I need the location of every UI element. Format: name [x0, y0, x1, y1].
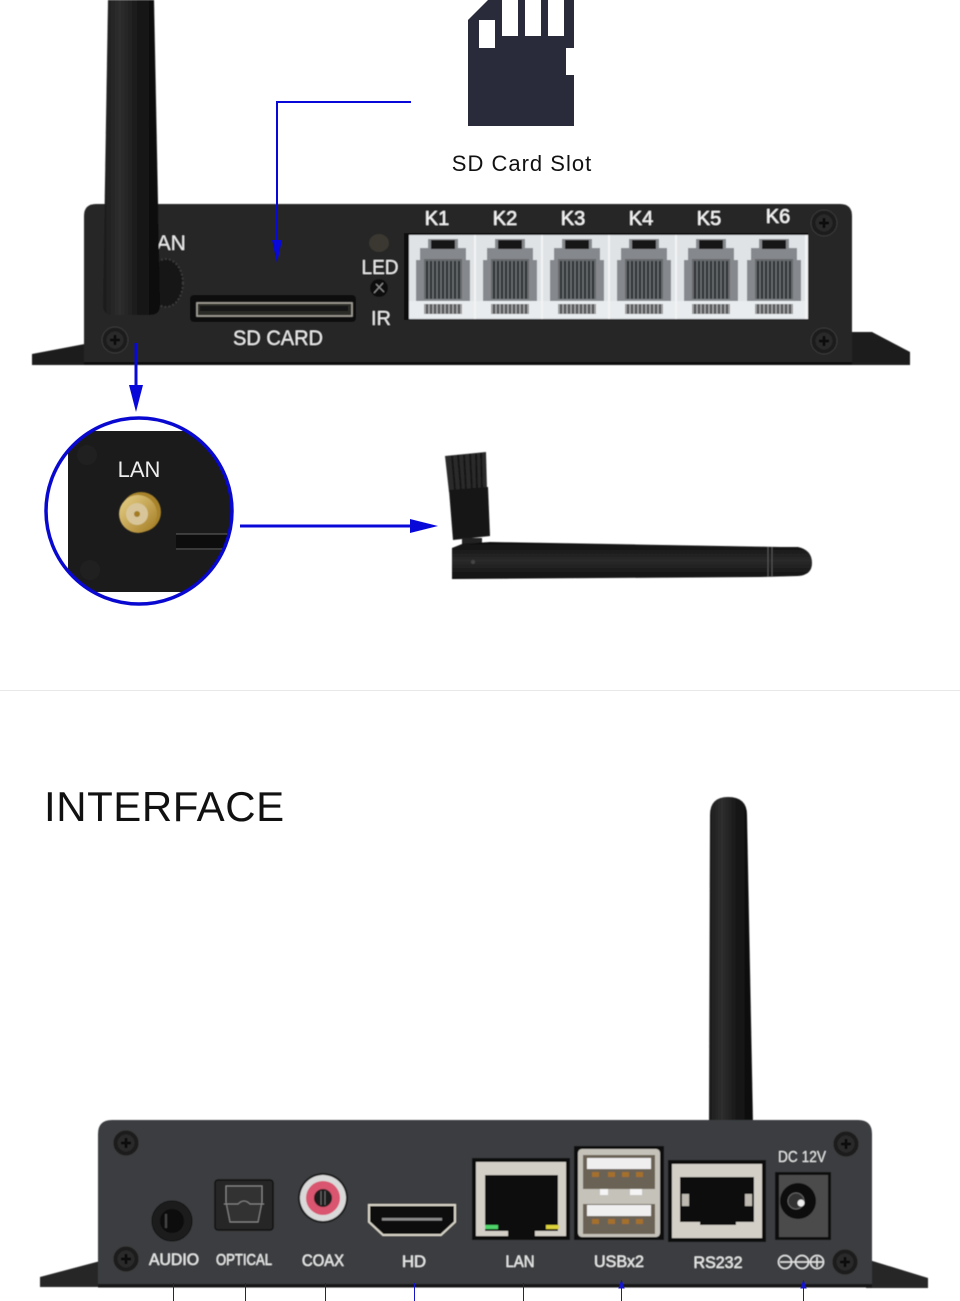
- arrow: to SD slot: [272, 102, 411, 263]
- device body: [84, 204, 852, 365]
- port labels: RS232: [694, 1254, 742, 1272]
- port labels: [149, 1251, 742, 1272]
- device: front panel: [32, 0, 910, 365]
- icon: SD card: [468, 0, 574, 126]
- port labels K1 to K6: K5: [697, 208, 721, 230]
- coax port: [298, 1173, 348, 1223]
- gold connector: [119, 492, 161, 533]
- arm: [452, 542, 812, 579]
- heading: INTERFACE: INTERFACE: [44, 783, 285, 830]
- divider: [0, 690, 960, 691]
- LAN port: [472, 1158, 570, 1240]
- audio jack: [152, 1201, 192, 1241]
- arrow: to antenna: [240, 519, 438, 533]
- port labels K1 to K6: K2: [493, 208, 517, 230]
- antenna nut: [149, 259, 183, 307]
- device: rear panel: [40, 797, 928, 1288]
- label: SD CARD: SD CARD: [233, 327, 323, 350]
- port labels K1 to K6: K3: [561, 208, 585, 230]
- polarity symbol: [778, 1256, 824, 1268]
- black panel: [68, 431, 243, 592]
- label: SD Card Slot: SD Card Slot: [452, 151, 592, 176]
- blue ring: [46, 418, 232, 604]
- knurled cap: [445, 452, 487, 492]
- optical port: [215, 1180, 273, 1230]
- SD card slot: [190, 295, 356, 322]
- barrel: [449, 487, 490, 540]
- antenna: [103, 0, 160, 315]
- mounting flanges: [40, 1259, 928, 1288]
- device body: [98, 1120, 872, 1287]
- port labels K1 to K6: K1: [425, 208, 449, 230]
- port labels: AUDIO: [149, 1251, 199, 1269]
- antenna: folded: [445, 452, 812, 579]
- port labels: HD: [402, 1253, 426, 1271]
- port labels K1 to K6: K4: [629, 208, 653, 230]
- detail circle: LAN connector: [46, 418, 243, 604]
- label: LAN: LAN: [118, 457, 160, 482]
- HD port: [369, 1205, 455, 1235]
- port labels: OPTICAL: [216, 1252, 272, 1269]
- label: DC 12V: DC 12V: [778, 1149, 827, 1166]
- neck: [462, 538, 482, 546]
- callout tick lines: [174, 1281, 806, 1301]
- LED and IR indicators: LED: [362, 257, 398, 279]
- label: LAN partly hidden: LAN: [145, 232, 186, 255]
- LED and IR indicators: IR: [371, 308, 391, 330]
- port labels: USBx2: [594, 1253, 644, 1271]
- LED and IR indicators: [362, 234, 398, 330]
- screws: [113, 1130, 859, 1275]
- port labels K1 to K6: K6: [766, 206, 790, 228]
- RS232 port: [668, 1160, 766, 1242]
- USB ports: [574, 1146, 664, 1240]
- screws: [102, 210, 837, 354]
- antenna: [709, 797, 753, 1124]
- port labels: LAN: [506, 1253, 534, 1271]
- port labels K1 to K6: [425, 206, 790, 230]
- port labels: COAX: [302, 1252, 344, 1270]
- RJ11 port block: [404, 233, 808, 320]
- DC power jack: [775, 1172, 831, 1240]
- arrow: to LAN detail: [129, 343, 143, 412]
- mounting flanges: [32, 332, 910, 365]
